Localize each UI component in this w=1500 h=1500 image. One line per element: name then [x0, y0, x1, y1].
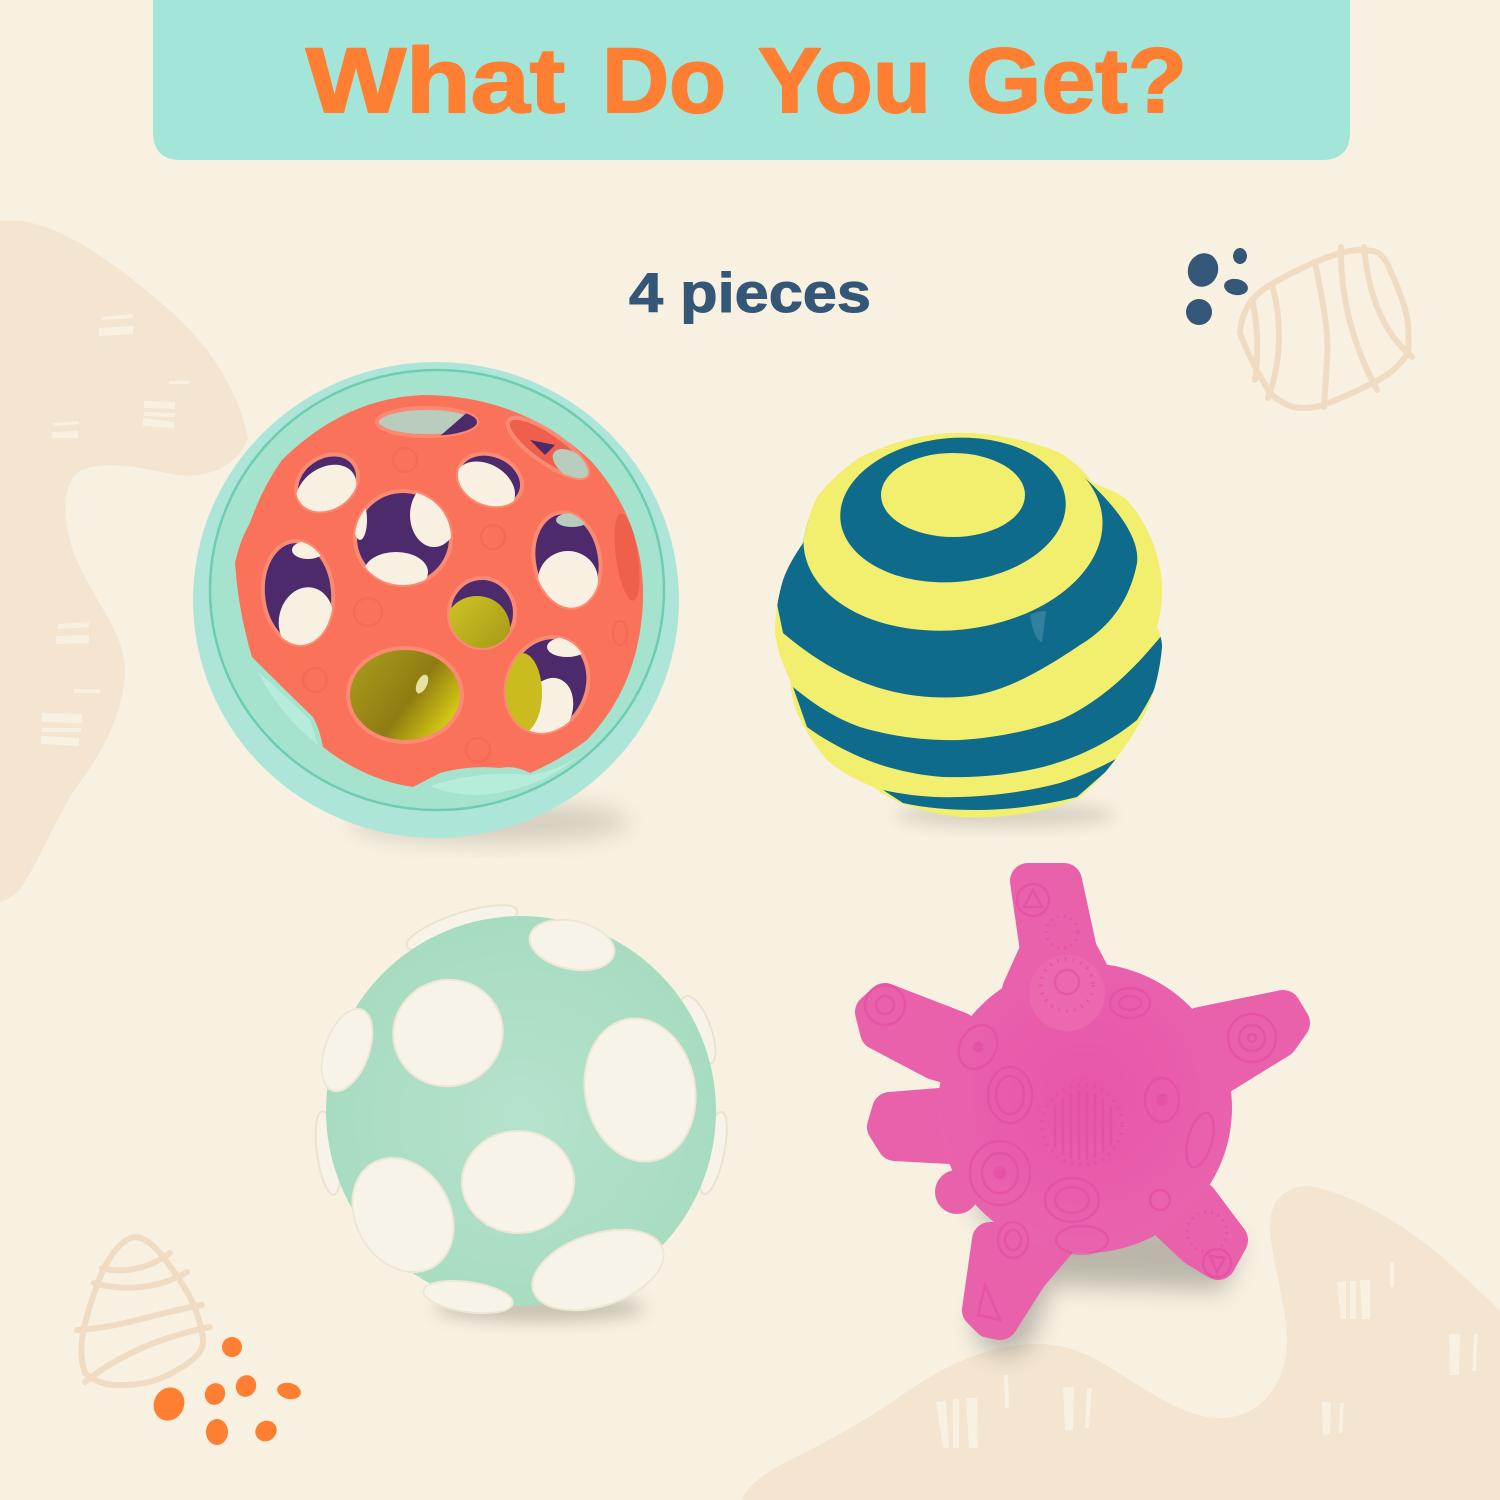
title [306, 30, 1187, 132]
mint shell [193, 362, 679, 838]
decorative blob: left [0, 220, 248, 902]
blue band 2 [793, 625, 1170, 777]
holes [377, 408, 477, 436]
ball: coral rattle in mint shell [193, 362, 679, 842]
edge dots behind [311, 896, 732, 1196]
shadow [350, 802, 630, 842]
centre yellow [881, 453, 1025, 537]
blue band 4 [883, 758, 1116, 810]
arms [873, 881, 1292, 1322]
moulded circles [303, 448, 627, 762]
upper blue band [770, 478, 1137, 697]
title: Do [602, 30, 726, 132]
title: What [306, 30, 565, 132]
yellow ring [804, 434, 1102, 631]
shadow [435, 1294, 645, 1322]
ball: pink spiky [865, 881, 1292, 1325]
header banner [153, 0, 1350, 160]
ball: mint with white dots [311, 896, 732, 1325]
shadow [895, 803, 1115, 827]
ball: blue and yellow stripes [770, 419, 1170, 827]
title: Get? [966, 30, 1187, 132]
highlight [1030, 611, 1046, 642]
coral ball [235, 395, 643, 787]
title: You [758, 30, 931, 132]
decorative blob: bottom right [742, 1186, 1500, 1500]
inner blue ring [840, 438, 1066, 582]
body [938, 963, 1232, 1253]
icon: outlined egg bottom left [77, 1237, 210, 1385]
icon: blue dots [1183, 248, 1249, 325]
surface pattern [865, 884, 1276, 1320]
icon: orange dots [148, 1337, 302, 1446]
body [775, 433, 1162, 817]
subtitle: 4 pieces [629, 261, 871, 324]
shadow [965, 1200, 1240, 1325]
icon: outlined striped egg top right [1240, 247, 1412, 408]
